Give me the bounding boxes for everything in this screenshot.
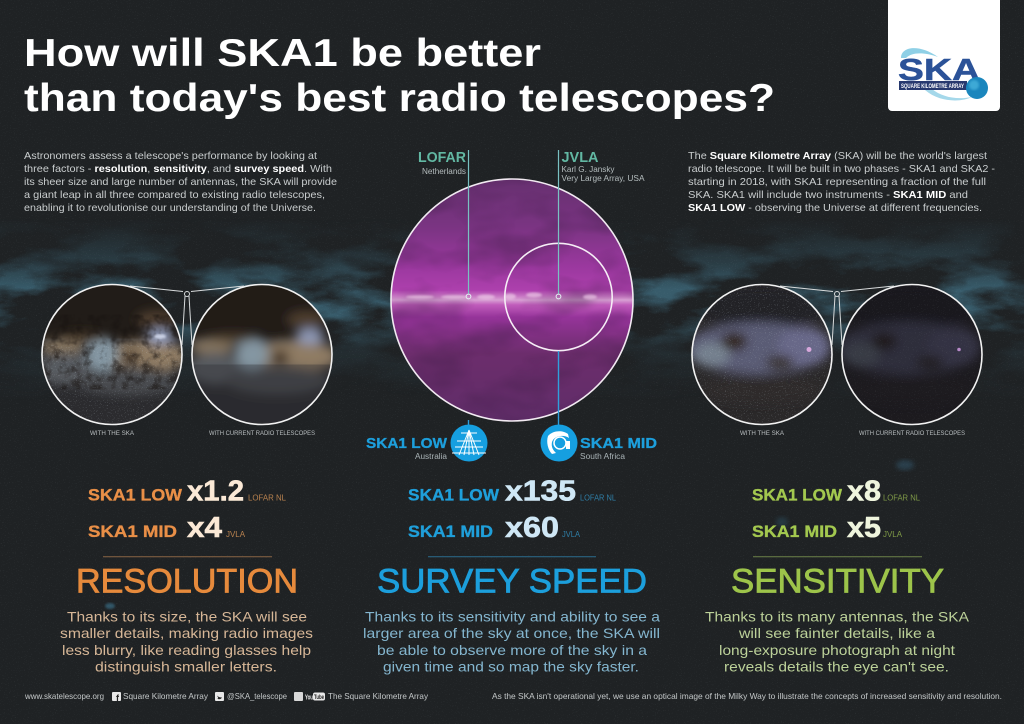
captions <box>90 430 315 437</box>
footer: image note: As the SKA isn't operational yet, we use an optical image of the Milky Way to illustrate the concepts of increased sensitivity and resolution. <box>492 692 1002 701</box>
label: SKA1 LOW: Australia <box>415 452 448 461</box>
intro paragraph: right: SKA1 LOW - observing the Universe at different frequencies. <box>688 202 982 214</box>
footer: links and social <box>24 692 429 703</box>
label: SKA1 LOW <box>366 435 448 461</box>
stat: SKA1 LOW x135: x135 <box>505 476 576 508</box>
captions: WITH CURRENT RADIO TELESCOPES <box>859 430 965 437</box>
stat: SKA1 LOW x8 <box>752 476 921 508</box>
stat: SKA1 LOW x1.2 <box>88 476 287 508</box>
description: sensitivity <box>705 608 970 674</box>
stat: SKA1 MID x4: SKA1 MID <box>88 522 177 541</box>
stat: SKA1 LOW x135: SKA1 LOW <box>408 486 500 504</box>
description: resolution: less blurry, like reading glasses help <box>62 642 311 658</box>
label: SKA1 MID: South Africa <box>580 452 626 461</box>
label: JVLA: Very Large Array, USA <box>562 174 645 183</box>
stat: SKA1 MID x4: JVLA <box>226 530 246 539</box>
label: JVLA: JVLA <box>562 150 599 166</box>
image: with current telescopes, blurred <box>188 282 338 426</box>
label: LOFAR: LOFAR <box>418 150 467 166</box>
panel: sensitivity comparison lenses <box>685 282 984 437</box>
magnifier glasses bridge <box>130 286 244 345</box>
label: SKA1 LOW: SKA1 LOW <box>366 435 448 452</box>
intro paragraph: right: The Square Kilometre Array (SKA) will be the world's largest <box>688 150 987 162</box>
description: survey speed: given time and so map the sky faster. <box>383 658 639 674</box>
intro paragraph: left: enabling it to revolutionise our understanding of the Universe. <box>24 202 316 214</box>
intro paragraph: left: its sheer size and large number of antennas, the SKA will provide <box>24 176 337 188</box>
stat: SKA1 MID x4: x4 <box>187 512 222 544</box>
panel: resolution comparison lenses <box>38 282 338 437</box>
title <box>24 32 775 120</box>
icon: mid-frequency dish <box>540 424 578 462</box>
description: survey speed: larger area of the sky at once, the SKA will <box>363 625 660 641</box>
large purple field of view: SKA1 <box>390 178 634 422</box>
label: LOFAR <box>418 150 467 176</box>
intro paragraph: right: SKA. SKA1 will include two instruments - SKA1 MID and <box>688 189 968 201</box>
stat: SKA1 MID x60: x60 <box>505 512 559 544</box>
label: SKA1 MID <box>580 435 657 461</box>
description: survey speed: Thanks to its sensitivity and ability to see a <box>365 608 660 624</box>
description: sensitivity: Thanks to its many antennas, the SKA <box>705 608 970 624</box>
icon: facebook: f <box>116 693 120 703</box>
SKA logo: SQUARE KILOMETRE ARRAY <box>901 83 965 90</box>
captions <box>740 430 965 437</box>
icon: low-frequency antenna <box>450 424 488 462</box>
label: LOFAR: Netherlands <box>422 167 466 176</box>
stat: SKA1 LOW x135: LOFAR NL <box>580 494 617 502</box>
description: resolution: smaller details, making radio images <box>60 625 313 641</box>
description: resolution: distinguish smaller letters. <box>95 658 277 674</box>
intro paragraph: right: starting in 2018, with SKA1 representing a fraction of the full <box>688 176 986 188</box>
stat: SKA1 LOW x1.2: SKA1 LOW <box>88 486 183 504</box>
stat: SKA1 MID x60: JVLA <box>562 530 581 539</box>
stat: SKA1 LOW x8: SKA1 LOW <box>752 486 843 504</box>
intro paragraph: right <box>688 150 996 214</box>
icon: youtube <box>294 692 325 702</box>
icon: youtube: Tube <box>314 695 324 701</box>
title: than today's best radio telescopes? <box>24 77 775 120</box>
captions: WITH THE SKA <box>740 430 785 437</box>
footer: links and social: @SKA_telescope <box>227 692 287 701</box>
title: How will SKA1 be better <box>24 32 541 75</box>
stat: SKA1 MID x5 <box>752 512 903 544</box>
stat: SKA1 LOW x135 <box>408 476 617 508</box>
SKA logo <box>888 0 1000 111</box>
heading: resolution: RESOLUTION <box>76 562 298 600</box>
icon: youtube: You <box>305 694 313 702</box>
label: SKA1 MID: SKA1 MID <box>580 435 657 452</box>
stat: SKA1 MID x5: JVLA <box>883 530 903 539</box>
SKA logo: SKA <box>898 52 980 87</box>
stat: SKA1 MID x5: x5 <box>847 512 881 544</box>
pointer lines <box>466 150 561 426</box>
captions: WITH CURRENT RADIO TELESCOPES <box>209 430 315 437</box>
heading: survey speed: SURVEY SPEED <box>377 562 647 600</box>
image: with the SKA, bright <box>685 282 834 426</box>
stat: SKA1 MID x60 <box>408 512 581 544</box>
icon: facebook <box>112 692 121 703</box>
stat: SKA1 LOW x1.2: LOFAR NL <box>248 494 287 502</box>
stat: SKA1 MID x60: SKA1 MID <box>408 522 493 541</box>
intro paragraph: right: radio telescope. It will be built in two phases - SKA1 and SKA2 - <box>688 163 996 175</box>
description: sensitivity: reveals details the eye can't see. <box>724 658 949 674</box>
panel: survey speed sky circles <box>366 150 657 462</box>
inner field of view: JVLA <box>505 243 612 351</box>
footer: links and social: Square Kilometre Array <box>123 692 209 701</box>
label: JVLA: Karl G. Jansky <box>562 165 614 174</box>
stat: SKA1 LOW x8: LOFAR NL <box>883 494 921 502</box>
description: resolution: Thanks to its size, the SKA will see <box>67 608 307 624</box>
intro paragraph: left: three factors - resolution, sensitivity, and survey speed . With <box>24 163 332 175</box>
image: with current telescopes, faint <box>835 282 984 426</box>
panel: survey speed stats <box>363 476 660 674</box>
stat: SKA1 MID x5: SKA1 MID <box>752 522 837 541</box>
intro paragraph: left <box>24 150 337 214</box>
intro paragraph: left: a giant leap in all three compared to existing radio telescopes, <box>24 189 325 201</box>
label: JVLA <box>562 150 645 183</box>
description: resolution <box>60 608 313 674</box>
description: survey speed <box>363 608 660 674</box>
stat: SKA1 LOW x1.2: x1.2 <box>187 476 244 508</box>
image: with the SKA, sharp <box>38 282 188 426</box>
footer: links and social: www.skatelescope.org <box>24 692 104 701</box>
intro paragraph: left: Astronomers assess a telescope's performance by looking at <box>24 150 317 162</box>
panel: resolution stats <box>60 476 313 674</box>
stat: SKA1 LOW x8: x8 <box>847 476 881 508</box>
icon: twitter <box>215 692 224 701</box>
panel: sensitivity stats <box>705 476 970 674</box>
stat: SKA1 MID x4 <box>88 512 246 544</box>
footer: links and social: The Square Kilometre Array <box>328 692 429 701</box>
heading: sensitivity: SENSITIVITY <box>731 562 944 600</box>
description: sensitivity: will see fainter details, like a <box>738 625 935 641</box>
magnifier glasses bridge <box>780 286 894 345</box>
description: survey speed: be able to observe more of the sky in a <box>377 642 647 658</box>
captions: WITH THE SKA <box>90 430 135 437</box>
description: sensitivity: long-exposure photograph at night <box>719 642 955 658</box>
